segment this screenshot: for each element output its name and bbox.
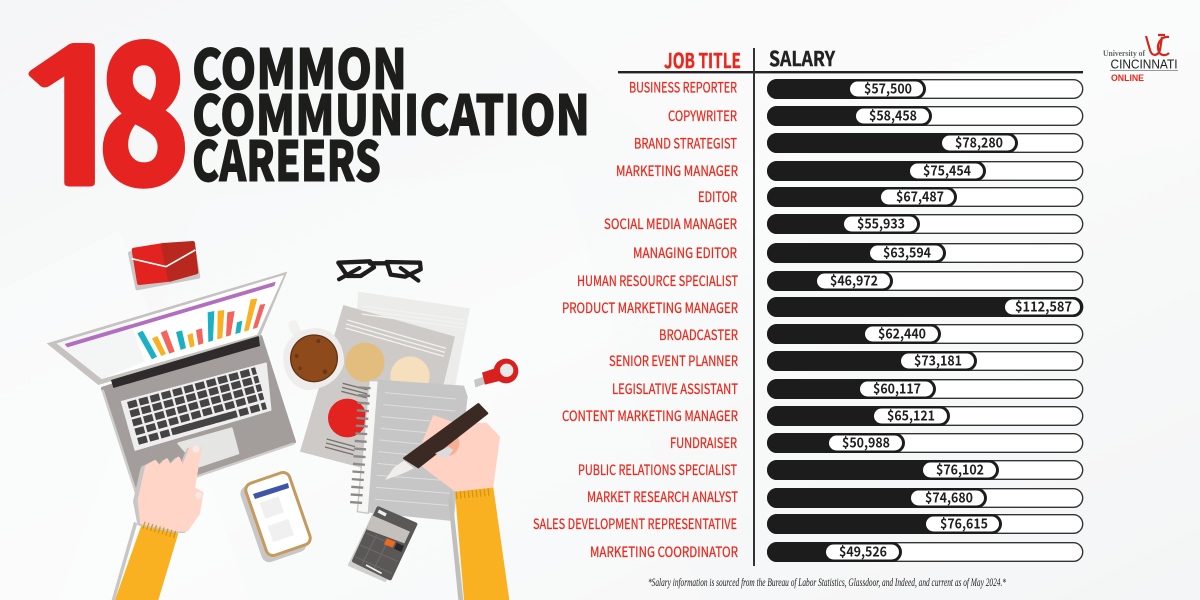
laptop chart bars bbox=[137, 299, 265, 359]
row: Market Research Analyst bbox=[587, 486, 1083, 508]
row: Broadcaster bbox=[659, 322, 1083, 345]
row: Marketing Coordinator: MARKETING COORDINATOR bbox=[590, 542, 738, 562]
row: Marketing Coordinator: $49,526 bbox=[839, 540, 887, 560]
big number 18 bbox=[0, 0, 191, 242]
row: Fundraiser: FUNDRAISER bbox=[670, 433, 737, 453]
row: Public Relations Specialist: PUBLIC RELATIONS SPECIALIST bbox=[578, 460, 737, 480]
table header bbox=[618, 43, 1083, 566]
row: Marketing Manager: MARKETING MANAGER bbox=[616, 161, 738, 181]
row: Fundraiser: $50,988 bbox=[842, 432, 890, 452]
heading: salary: SALARY bbox=[769, 43, 835, 72]
title bbox=[0, 0, 590, 242]
row: Legislative Assistant: $60,117 bbox=[873, 378, 921, 398]
icon: glasses bbox=[338, 261, 421, 281]
row: Content Marketing Manager bbox=[562, 404, 1083, 426]
row: Brand Strategist bbox=[634, 132, 1083, 154]
row: Marketing Manager bbox=[616, 160, 1083, 181]
icon: phone bbox=[238, 471, 312, 564]
icon: notebook bbox=[356, 381, 467, 520]
row: Broadcaster: BROADCASTER bbox=[659, 325, 738, 345]
row: Copywriter bbox=[668, 104, 1083, 126]
row: Editor bbox=[698, 186, 1083, 207]
row: Sales Development Representative bbox=[533, 512, 1083, 534]
big number 18: 1 bbox=[0, 28, 150, 212]
row: Copywriter: $58,458 bbox=[869, 104, 917, 124]
title line: common: COMMON bbox=[192, 25, 407, 105]
row: Editor: EDITOR bbox=[698, 187, 737, 207]
row: Senior Event Planner: $73,181 bbox=[914, 350, 962, 370]
row: Public Relations Specialist: $76,102 bbox=[936, 458, 984, 478]
icon: right hand with pen bbox=[385, 404, 509, 600]
footnote: *Salary information is sourced from the Bureau of Labor Statistics, Glassdoor, and Indeed, and current as of May 2024.* bbox=[648, 577, 1006, 589]
laptop keyboard bbox=[122, 363, 271, 450]
icon: calculator bbox=[349, 508, 415, 581]
row: Social Media Manager bbox=[604, 212, 1083, 234]
row: Product Marketing Manager bbox=[562, 296, 1083, 318]
logo: University of Cincinnati Online: ONLINE bbox=[1111, 73, 1144, 84]
title line: communication: COMMUNICATION bbox=[192, 71, 590, 151]
row: Human Resource Specialist: $46,972 bbox=[830, 270, 878, 290]
row: Copywriter: COPYWRITER bbox=[668, 106, 737, 126]
row: Product Marketing Manager: $112,587 bbox=[1015, 296, 1072, 316]
row: Product Marketing Manager: PRODUCT MARKETING MANAGER bbox=[562, 298, 738, 318]
row: Marketing Manager: $75,454 bbox=[923, 160, 971, 180]
icon: usb drive bbox=[474, 359, 518, 387]
logo: University of Cincinnati Online bbox=[1103, 35, 1178, 84]
row: Managing Editor: $63,594 bbox=[883, 242, 931, 262]
row: Senior Event Planner bbox=[609, 350, 1083, 371]
row: Business Reporter bbox=[629, 78, 1083, 99]
heading: job title: JOB TITLE bbox=[664, 45, 741, 74]
row: Legislative Assistant bbox=[612, 378, 1083, 399]
logo: University of Cincinnati Online: CINCINNATI bbox=[1110, 58, 1178, 72]
chart: salaries by job title bbox=[533, 78, 1083, 562]
title line: careers: CAREERS bbox=[192, 117, 381, 197]
row: Senior Event Planner: SENIOR EVENT PLANNER bbox=[609, 351, 738, 371]
row: Business Reporter: BUSINESS REPORTER bbox=[629, 78, 737, 98]
row: Editor: $67,487 bbox=[896, 186, 944, 206]
row: Content Marketing Manager: CONTENT MARKETING MANAGER bbox=[562, 406, 738, 426]
illustration: right desk items bbox=[283, 261, 518, 600]
row: Managing Editor: MANAGING EDITOR bbox=[633, 243, 737, 263]
row: Human Resource Specialist bbox=[577, 270, 1083, 291]
icon: papers bbox=[300, 292, 470, 470]
row: Business Reporter: $57,500 bbox=[864, 78, 912, 98]
row: Legislative Assistant: LEGISLATIVE ASSISTANT bbox=[612, 379, 738, 399]
row: Social Media Manager: $55,933 bbox=[857, 212, 905, 232]
illustration: left desk items bbox=[47, 243, 294, 600]
row: Sales Development Representative: SALES DEVELOPMENT REPRESENTATIVE bbox=[533, 514, 737, 534]
row: Market Research Analyst: MARKET RESEARCH ANALYST bbox=[587, 487, 738, 507]
row: Content Marketing Manager: $65,121 bbox=[887, 404, 935, 424]
row: Brand Strategist: $78,280 bbox=[955, 132, 1003, 152]
row: Human Resource Specialist: HUMAN RESOURCE SPECIALIST bbox=[577, 271, 738, 291]
icon: envelope bbox=[130, 243, 198, 288]
logo: University of Cincinnati Online: University of bbox=[1103, 49, 1145, 58]
row: Social Media Manager: SOCIAL MEDIA MANAGER bbox=[604, 214, 737, 234]
row: Market Research Analyst: $74,680 bbox=[925, 486, 973, 506]
row: Brand Strategist: BRAND STRATEGIST bbox=[634, 134, 737, 154]
icon: laptop bbox=[47, 272, 294, 497]
row: Broadcaster: $62,440 bbox=[878, 322, 926, 342]
row: Marketing Coordinator bbox=[590, 540, 1083, 562]
row: Fundraiser bbox=[670, 432, 1083, 453]
icon: coffee cup bbox=[283, 319, 344, 390]
row: Managing Editor bbox=[633, 242, 1083, 263]
icon: left hand and sleeve bbox=[112, 445, 202, 600]
row: Public Relations Specialist bbox=[578, 458, 1083, 480]
row: Sales Development Representative: $76,615 bbox=[940, 512, 988, 532]
